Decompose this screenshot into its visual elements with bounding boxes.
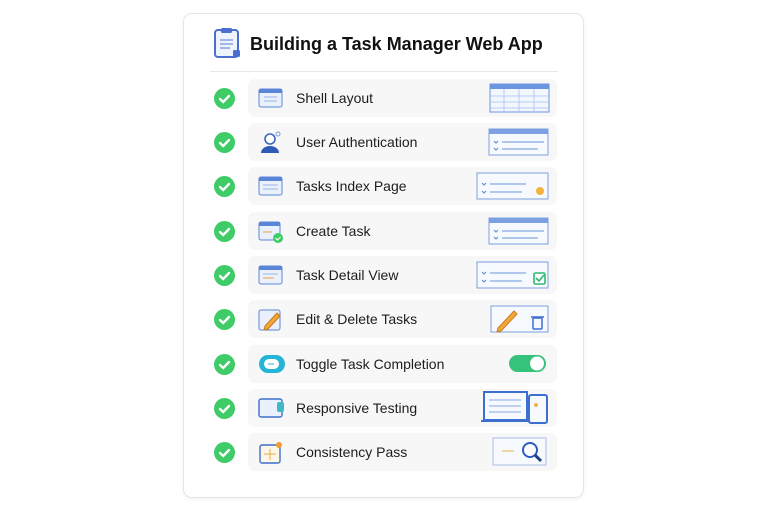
row: Create Task: Create Task — [296, 223, 370, 239]
row: Toggle Task Completion: Toggle Task Completion — [296, 356, 444, 372]
row: Edit & Delete Tasks — [214, 306, 548, 333]
row: Responsive Testing — [214, 391, 548, 424]
row: User Authentication: User Authentication — [296, 134, 417, 150]
row: Tasks Index Page: Tasks Index Page — [296, 178, 407, 194]
row: Shell Layout: Shell Layout — [296, 90, 373, 106]
row: User Authentication — [214, 128, 548, 156]
row: Toggle Task Completion — [214, 354, 546, 375]
row: Task Detail View: Task Detail View — [296, 267, 398, 283]
row: Tasks Index Page — [214, 172, 548, 200]
row: Create Task — [214, 218, 548, 244]
row: Consistency Pass — [214, 438, 546, 466]
row: Task Detail View — [214, 262, 548, 288]
row: Edit & Delete Tasks: Edit & Delete Tasks — [296, 311, 417, 327]
card — [183, 13, 584, 498]
row: Shell Layout — [214, 84, 550, 112]
row: Responsive Testing: Responsive Testing — [296, 400, 417, 416]
row: Consistency Pass: Consistency Pass — [296, 444, 407, 460]
title: Building a Task Manager Web App — [250, 34, 543, 54]
icon: clipboard — [214, 28, 240, 58]
